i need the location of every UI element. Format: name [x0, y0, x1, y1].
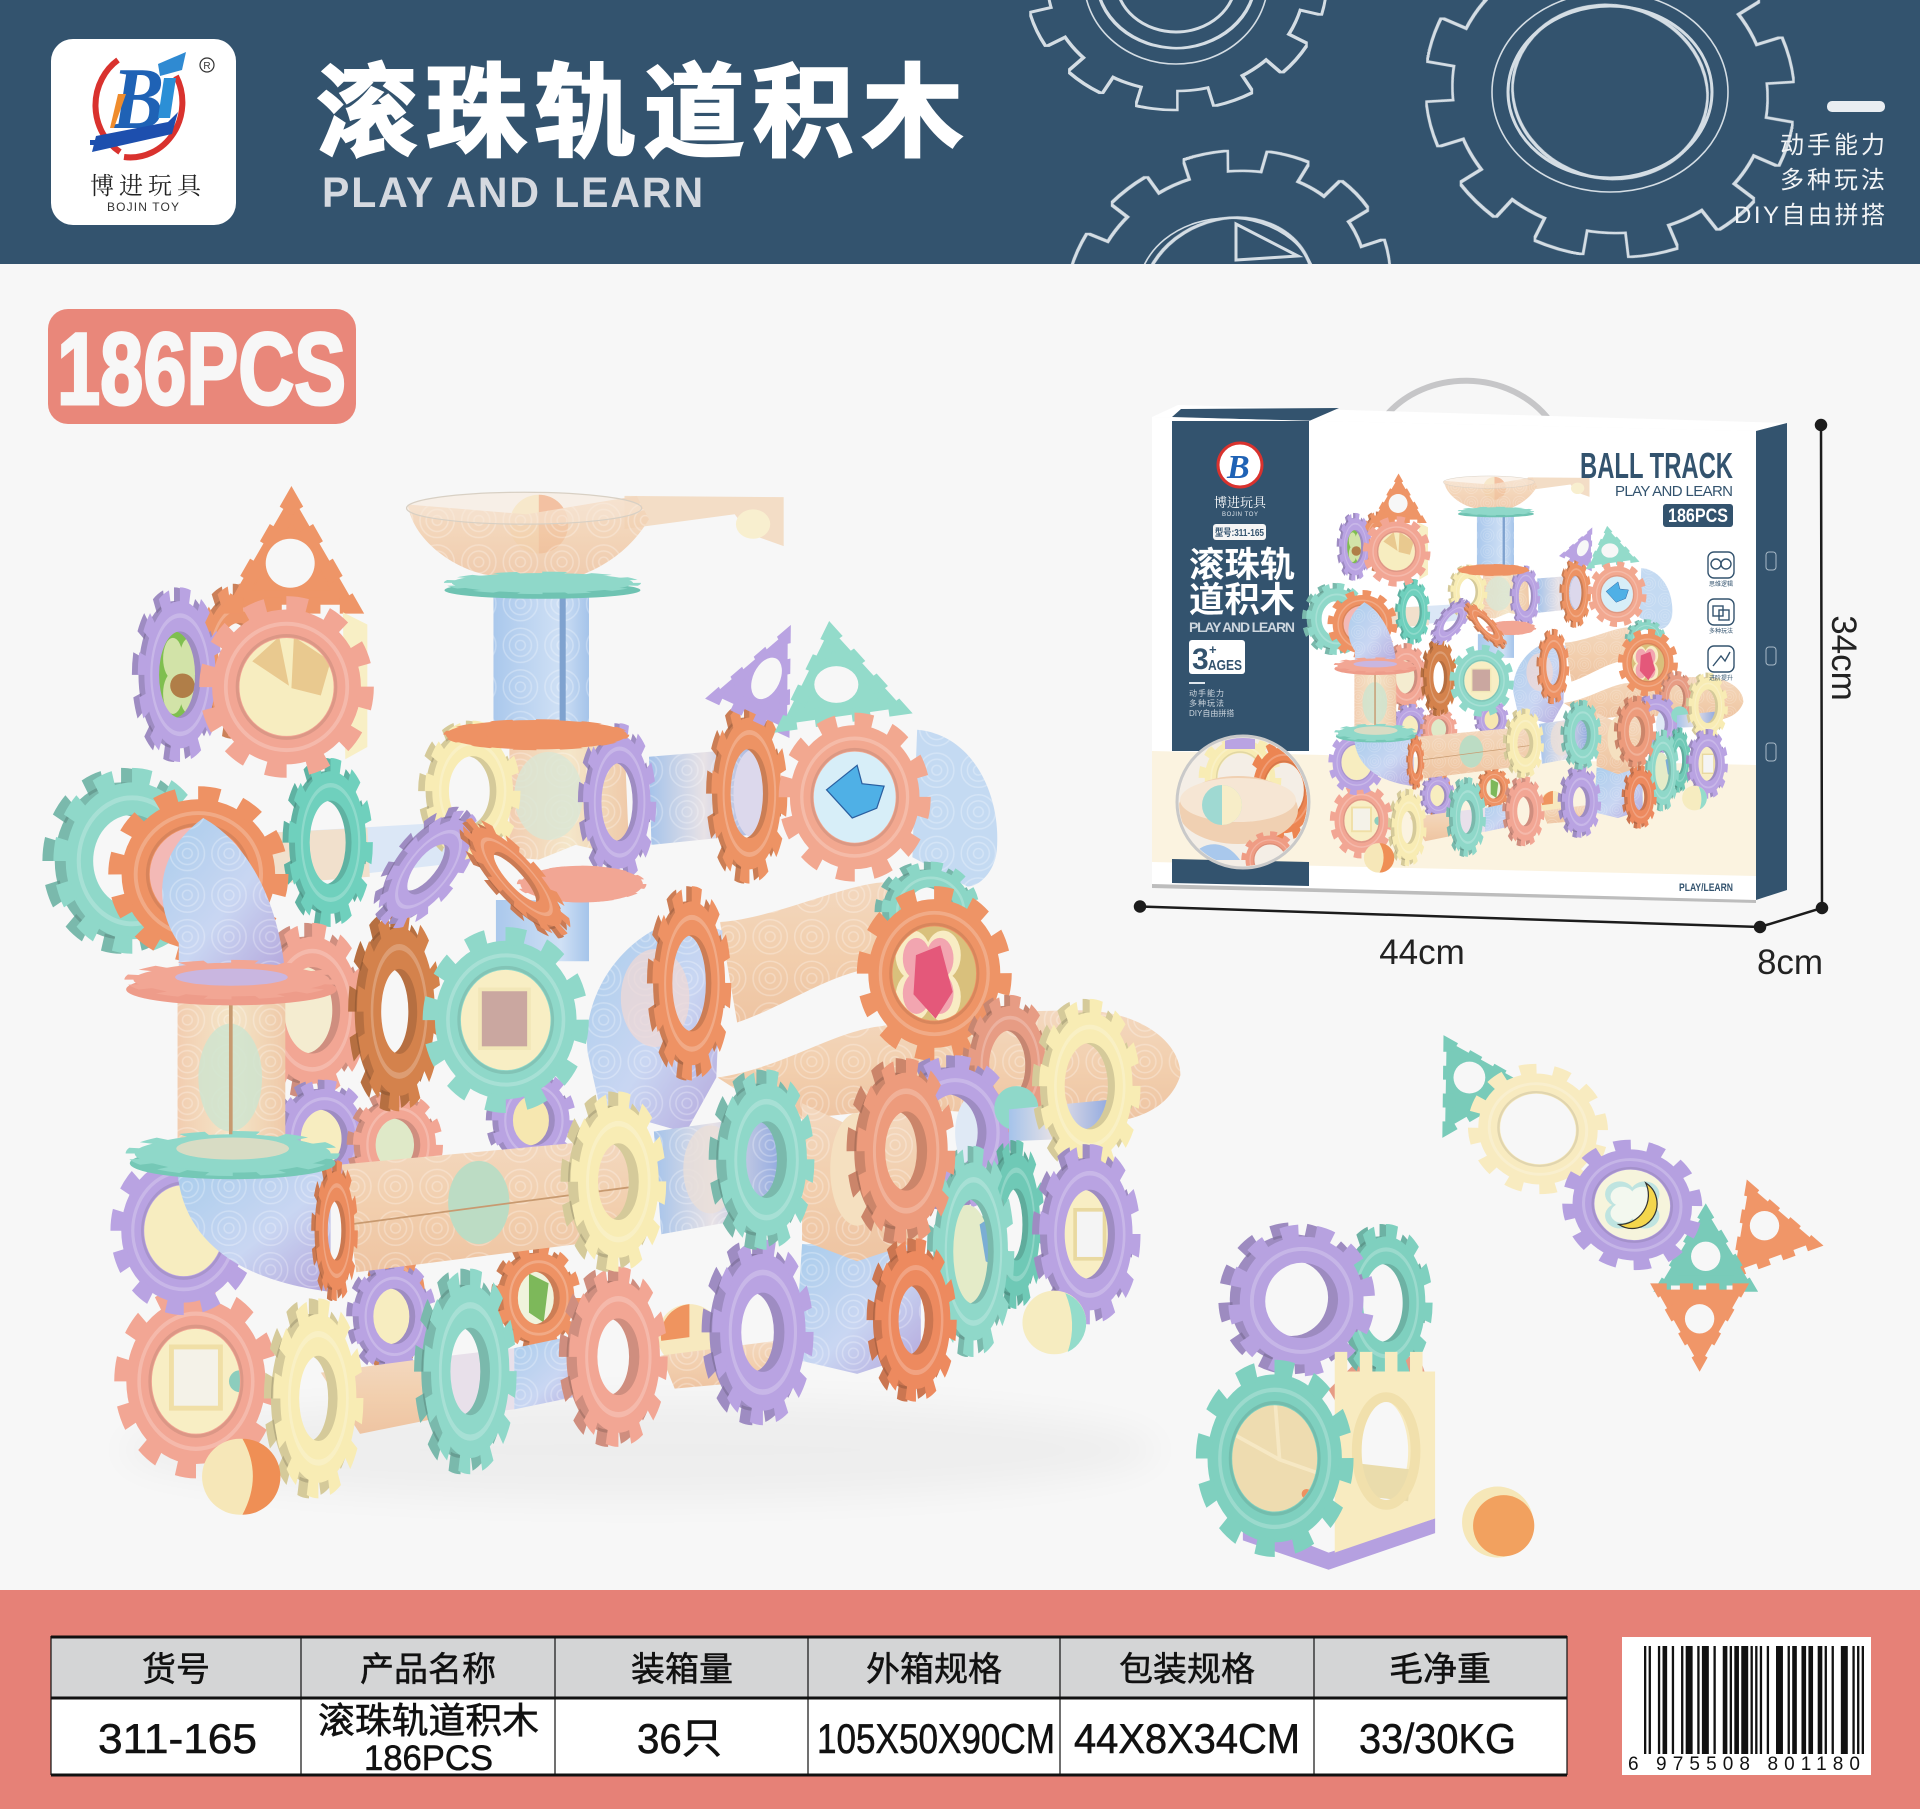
cream gear piece — [1461, 1056, 1615, 1202]
feature list: 多种玩法 — [1780, 167, 1885, 194]
brand latin: BOJIN TOY — [107, 200, 179, 214]
table header: 毛净重 — [1389, 1651, 1491, 1689]
handle — [1385, 381, 1550, 421]
right side gears — [889, 1002, 1136, 1354]
back left gears — [50, 591, 487, 945]
logo mark: R — [203, 61, 211, 72]
specification table — [51, 1636, 1567, 1778]
table header: 外箱规格 — [866, 1651, 1002, 1689]
feature list: DIY自由拼搭 — [1734, 202, 1885, 229]
purple upper gear — [1213, 1217, 1381, 1381]
age tag — [1189, 640, 1245, 676]
table row: 44X8X34CM — [1074, 1715, 1300, 1762]
age tag: 3 — [1192, 643, 1209, 676]
box heading: BALL TRACK — [1580, 445, 1733, 486]
box left panel: 博进玩具 — [1214, 495, 1267, 510]
brand name: 博进玩具 — [90, 173, 202, 200]
middle ramp — [720, 866, 1004, 1052]
box footer label: PLAY/LEARN — [1679, 882, 1733, 894]
box title — [1189, 546, 1295, 620]
dimension: width: 44cm — [1379, 933, 1465, 972]
big peach tube and lower elbow — [117, 1067, 953, 1416]
product box: 多种玩法 — [1709, 627, 1733, 635]
box left panel: BOJIN TOY — [1222, 512, 1258, 518]
barcode: 6 975508 801180 — [1628, 1754, 1860, 1775]
teal upper gear — [1338, 1232, 1428, 1374]
barcode — [1622, 1637, 1871, 1775]
table row: 36只 — [637, 1715, 722, 1762]
model tag: 型号:311-165 — [1215, 526, 1264, 539]
box title: 滚珠轨 — [1189, 546, 1295, 585]
logo card — [51, 39, 236, 225]
box left panel — [1172, 421, 1309, 886]
teal triangle piece — [1412, 1024, 1521, 1128]
box side — [1756, 423, 1787, 900]
teal small piece — [1663, 1215, 1748, 1286]
model tag — [1213, 524, 1266, 540]
marble: orange — [1462, 1487, 1534, 1558]
logo mark — [90, 51, 214, 157]
cube base — [1243, 1518, 1435, 1570]
table header — [142, 1651, 1491, 1689]
box top face — [1152, 405, 1787, 431]
title: 滚珠轨道积木 — [316, 58, 963, 170]
column and marble bowl — [407, 492, 784, 961]
dimension: height: 34cm — [1824, 615, 1863, 701]
subtitle: PLAY AND LEARN — [322, 169, 705, 217]
box feature list: 多种玩法 — [1189, 698, 1225, 708]
center gears and blue elbow — [253, 798, 727, 1193]
product box — [1135, 381, 1863, 982]
junction — [423, 720, 771, 902]
header band — [0, 0, 1920, 456]
mini toy on the box — [1305, 476, 1743, 873]
piece count badge: 186PCS — [57, 312, 346, 426]
connected gear pieces — [1412, 1024, 1813, 1361]
upper left elbow and cylinder — [117, 795, 337, 1151]
right gear cluster with K — [710, 621, 923, 875]
dimension: depth: 8cm — [1757, 943, 1823, 982]
product box: PLAY AND LEARN — [1615, 483, 1733, 500]
box left panel: PLAY AND LEARN — [1189, 619, 1295, 635]
product box: 思维逻辑 — [1709, 580, 1733, 588]
table row: 滚珠轨道积木 — [318, 1700, 539, 1741]
feature list — [1734, 101, 1885, 229]
bottom left gear and lower tubes — [122, 1247, 784, 1489]
table row — [98, 1700, 1516, 1778]
table header: 装箱量 — [631, 1651, 733, 1689]
cream side gear — [1335, 1362, 1435, 1553]
box piece count: 186PCS — [1668, 506, 1728, 527]
table row: 33/30KG — [1359, 1715, 1516, 1762]
purple gear with moon — [1556, 1132, 1709, 1278]
orange triangle piece — [1713, 1176, 1813, 1271]
table header: 产品名称 — [360, 1651, 496, 1689]
decorative gear line drawings — [1041, 0, 1800, 456]
box feature icons — [1708, 552, 1734, 672]
box front — [1152, 417, 1756, 900]
back ramps and dome — [718, 730, 1180, 1122]
orange lower piece — [1660, 1289, 1740, 1361]
floor shadow — [120, 1400, 1160, 1500]
box feature list: 动手能力 — [1189, 688, 1225, 698]
feature list: 动手能力 — [1780, 132, 1885, 159]
table row: 105X50X90CM — [817, 1715, 1055, 1762]
main toy: marble run tower — [50, 492, 1180, 1515]
box feature list: DIY自由拼搭 — [1189, 708, 1234, 718]
cube back pieces — [1329, 1347, 1433, 1420]
box logo: B — [1226, 449, 1250, 486]
product box: 进阶提升 — [1709, 674, 1733, 682]
teal front gear — [1203, 1369, 1346, 1548]
marble: bottom — [202, 1439, 280, 1515]
age tag: AGES — [1208, 657, 1242, 674]
table header: 货号 — [142, 1651, 210, 1689]
table row: 311-165 — [98, 1715, 257, 1762]
table header: 包装规格 — [1119, 1651, 1255, 1689]
logo mark: B — [111, 51, 164, 148]
age tag: + — [1209, 642, 1217, 657]
box title: 道积木 — [1189, 581, 1295, 620]
detail inset circle — [1176, 734, 1310, 870]
box logo — [1218, 443, 1262, 487]
table row: 186PCS — [364, 1739, 493, 1778]
box feature list — [1189, 688, 1234, 718]
dimension lines — [1135, 420, 1827, 932]
footer band — [0, 1590, 1920, 1809]
pink gear with triangle — [136, 502, 367, 769]
gear cube — [1203, 1217, 1534, 1570]
